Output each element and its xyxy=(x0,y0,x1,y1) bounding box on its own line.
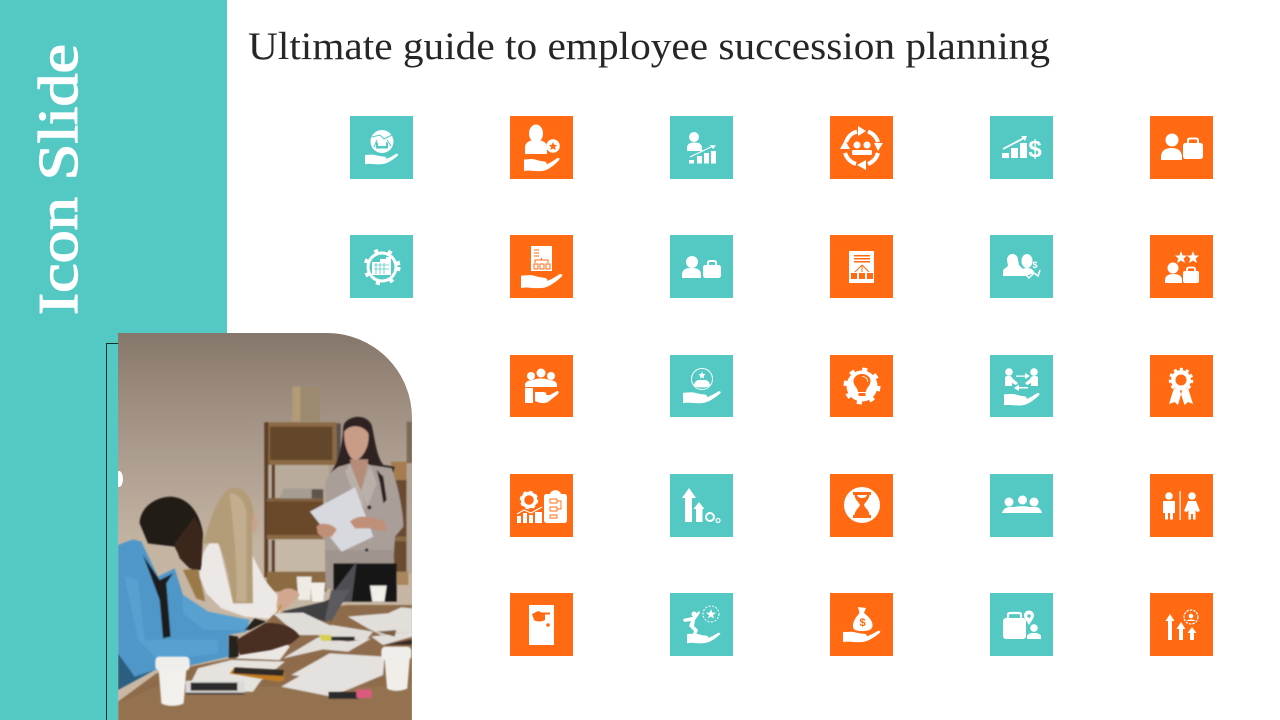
background: shelves and standing woman xyxy=(264,387,412,602)
icon: hand holding org chart document xyxy=(510,235,573,298)
icon: award rosette xyxy=(1150,355,1213,417)
icon: hourglass xyxy=(830,474,893,537)
icon: two employees with salary trend: $ xyxy=(1032,260,1038,270)
icon: person and briefcase with stars xyxy=(1150,235,1213,298)
icon: man and woman symbol xyxy=(1150,474,1213,537)
icon: briefcase location and person xyxy=(990,593,1053,656)
icon: document with hierarchy xyxy=(830,235,893,298)
lamp glow xyxy=(118,471,123,487)
icon: hand holding globe of people xyxy=(350,116,413,179)
icon: runner reaching star above hand xyxy=(670,593,733,656)
icon: gear with buildings xyxy=(350,235,413,298)
icon: exchange between employees over hand xyxy=(990,355,1053,417)
photo: team meeting around a table xyxy=(115,333,412,720)
icon: growth bars and dollar xyxy=(990,116,1053,179)
icon: rising arrows and gears xyxy=(670,474,733,537)
icon: money bag on hand xyxy=(830,593,893,656)
table and papers xyxy=(118,590,412,720)
seated blonde woman xyxy=(183,487,300,622)
icon: three people group xyxy=(990,474,1053,537)
wall xyxy=(118,333,412,720)
sidebar panel xyxy=(0,0,227,720)
icon: money bag on hand: $ xyxy=(859,617,866,629)
icon: hand holding circle of team xyxy=(670,355,733,417)
icon: rising arrows with people circle xyxy=(1150,593,1213,656)
icon: person with star badge on hand xyxy=(510,116,573,179)
icon: two employees with salary trend xyxy=(990,235,1053,298)
photo frame line xyxy=(106,344,118,720)
cups, phone, calculator and marker xyxy=(155,647,411,706)
icon: gear with lightbulb xyxy=(830,355,893,417)
icon: team over gift and hand xyxy=(510,355,573,417)
heading: Ultimate guide to employee succession planning xyxy=(248,25,1050,68)
sidebar title: Icon Slide: Icon Slide xyxy=(28,44,90,315)
icon: growth bars and dollar: $ xyxy=(1028,136,1042,163)
man in blue blazer xyxy=(118,497,300,690)
icon: circular arrows around team xyxy=(830,116,893,179)
icon: door with pointing hand xyxy=(510,593,573,656)
icon: person with briefcase xyxy=(670,235,733,298)
icon: gear chart and clipboard xyxy=(510,474,573,537)
icon: person with briefcase xyxy=(1150,116,1213,179)
icon: person with growth chart xyxy=(670,116,733,179)
